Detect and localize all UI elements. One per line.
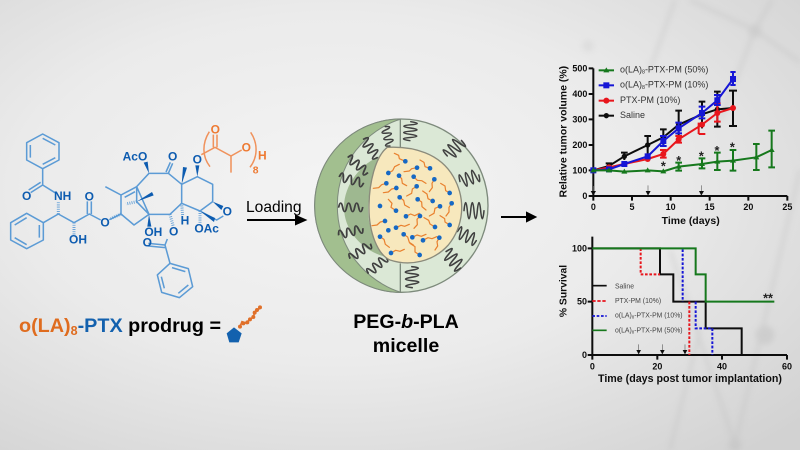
encapsulated prodrug tails: [372, 153, 452, 255]
legend: PTX-PM (10%): [620, 95, 680, 105]
atom labels: O: [168, 150, 177, 164]
dark crescent: [315, 119, 401, 292]
dosing arrows: [636, 344, 687, 354]
legend: 8: [642, 70, 645, 76]
hashed bonds: [58, 202, 200, 235]
legend: o(LA): [620, 64, 642, 74]
atom labels: O: [22, 189, 31, 203]
survival legend: PTX-PM (10%): [615, 298, 661, 305]
survival legend: -PTX-PM (50%): [634, 327, 683, 334]
series: o(LA)8-PTX-PM 10%: [593, 72, 736, 170]
atom labels: O: [85, 189, 94, 203]
background network pattern: [582, 0, 800, 450]
prodrug equation label: 8: [71, 324, 78, 338]
dosing arrows: [591, 185, 704, 196]
chart: survival: [559, 237, 792, 385]
survival legend: -PTX-PM (10%): [634, 313, 683, 320]
oligolactide labels: O: [211, 122, 220, 136]
survival legend: Saline: [615, 284, 634, 291]
icon: prodrug pentagon with chain: [227, 305, 262, 342]
series: PTX-PM: [593, 103, 733, 170]
chart: relative tumor volume: [558, 63, 792, 227]
prodrug equation label: o(LA): [19, 315, 71, 337]
legend: -PTX-PM (50%): [645, 64, 708, 74]
survival axes: [588, 237, 787, 360]
legend: o(LA): [620, 80, 642, 90]
legend: [599, 64, 708, 120]
x tick labels: 0: [591, 202, 596, 212]
PLA core: [369, 147, 462, 263]
survival legend: o(LA): [615, 313, 632, 320]
saline markers: [591, 107, 720, 173]
cut plane divider: [398, 119, 402, 292]
significance stars: *: [715, 144, 720, 158]
y axis title: Relative tumor volume (%): [558, 66, 569, 198]
atom labels: OH: [144, 225, 162, 239]
chemical structure: o(LA)8-PTX: [11, 122, 267, 298]
micelle label line 2: micelle: [373, 335, 439, 357]
survival y tick labels: 100: [572, 243, 587, 253]
legend: 8: [642, 85, 645, 91]
x tick labels: 10: [666, 202, 676, 212]
label: Loading: Loading: [246, 199, 302, 216]
oligolactide labels: H: [258, 149, 267, 163]
paclitaxel skeleton bonds: [11, 134, 223, 298]
significance stars: *: [676, 154, 681, 168]
atom labels: O: [193, 152, 202, 166]
survival y tick labels: [572, 243, 587, 360]
atom labels: OH: [69, 232, 87, 246]
blue markers: [590, 76, 736, 173]
axes: [589, 68, 787, 201]
arrow: loading: [247, 216, 305, 224]
atom labels: O: [169, 224, 178, 238]
prodrug equation label: -PTX: [78, 315, 123, 337]
atom labels: AcO: [123, 149, 147, 163]
curve: PTX-PM: [641, 248, 689, 355]
stereo bonds: [137, 162, 223, 227]
outer shell: [315, 119, 488, 292]
atom labels: H: [181, 214, 189, 228]
atom labels: NH: [54, 189, 71, 203]
survival y axis title: % Survival: [559, 265, 570, 317]
survival legend: [592, 284, 683, 334]
survival y tick labels: 0: [582, 350, 587, 360]
survival legend: 8: [632, 329, 635, 334]
x tick labels: [591, 202, 792, 212]
curve: saline: [592, 248, 742, 355]
survival legend: o(LA): [615, 327, 632, 334]
encapsulated prodrug heads: [378, 159, 454, 257]
micelle: [315, 119, 488, 292]
legend: -PTX-PM (10%): [645, 80, 708, 90]
significance stars: *: [661, 160, 666, 174]
PEG corona chains: [337, 121, 484, 288]
green markers: [590, 147, 775, 174]
atom labels: O: [223, 204, 232, 218]
oligolactide labels: 8: [253, 165, 259, 176]
PTX-PM markers: [590, 105, 736, 173]
atom labels: [22, 149, 232, 249]
y tick labels: 0: [582, 191, 587, 201]
y tick labels: 400: [572, 89, 587, 99]
series: o(LA)8-PTX-PM 50%: [593, 131, 775, 172]
survival x tick labels: [590, 361, 792, 371]
y tick labels: [572, 63, 587, 201]
legend: Saline: [620, 110, 645, 120]
survival x axis title: Time (days post tumor implantation): [598, 373, 782, 385]
y tick labels: 300: [572, 114, 587, 124]
x tick labels: 5: [629, 202, 634, 212]
significance stars: **: [763, 292, 773, 306]
significance stars: [661, 141, 735, 174]
survival x tick labels: 0: [590, 361, 595, 371]
y tick labels: 500: [572, 63, 587, 73]
series: saline: [593, 91, 737, 170]
micelle label: PEG-b-PLA: [353, 311, 459, 333]
oligolactide labels: [211, 122, 267, 176]
x axis title: Time (days): [662, 216, 720, 227]
survival x tick labels: 20: [652, 361, 662, 371]
significance stars: *: [699, 150, 704, 164]
curve: o(LA)8-PTX-PM 50%: [592, 248, 774, 302]
survival x tick labels: 60: [782, 361, 792, 371]
x tick labels: 20: [743, 202, 753, 212]
atom labels: OAc: [194, 222, 219, 236]
survival y tick labels: 50: [577, 297, 587, 307]
atom labels: O: [143, 235, 152, 249]
inner dark band: [344, 153, 387, 257]
x tick labels: 15: [705, 202, 715, 212]
survival x tick labels: 40: [717, 361, 727, 371]
y tick labels: 200: [572, 140, 587, 150]
oligolactide chain: [201, 132, 256, 173]
y tick labels: 100: [572, 165, 587, 175]
oligolactide labels: O: [242, 140, 251, 154]
x tick labels: 25: [782, 202, 792, 212]
survival legend: 8: [632, 315, 635, 320]
significance stars: *: [730, 141, 735, 155]
arrow: to results: [501, 213, 535, 221]
prodrug equation label: prodrug =: [123, 315, 221, 337]
curve: o(LA)8-PTX-PM 10%: [683, 249, 712, 355]
atom labels: O: [100, 215, 110, 229]
